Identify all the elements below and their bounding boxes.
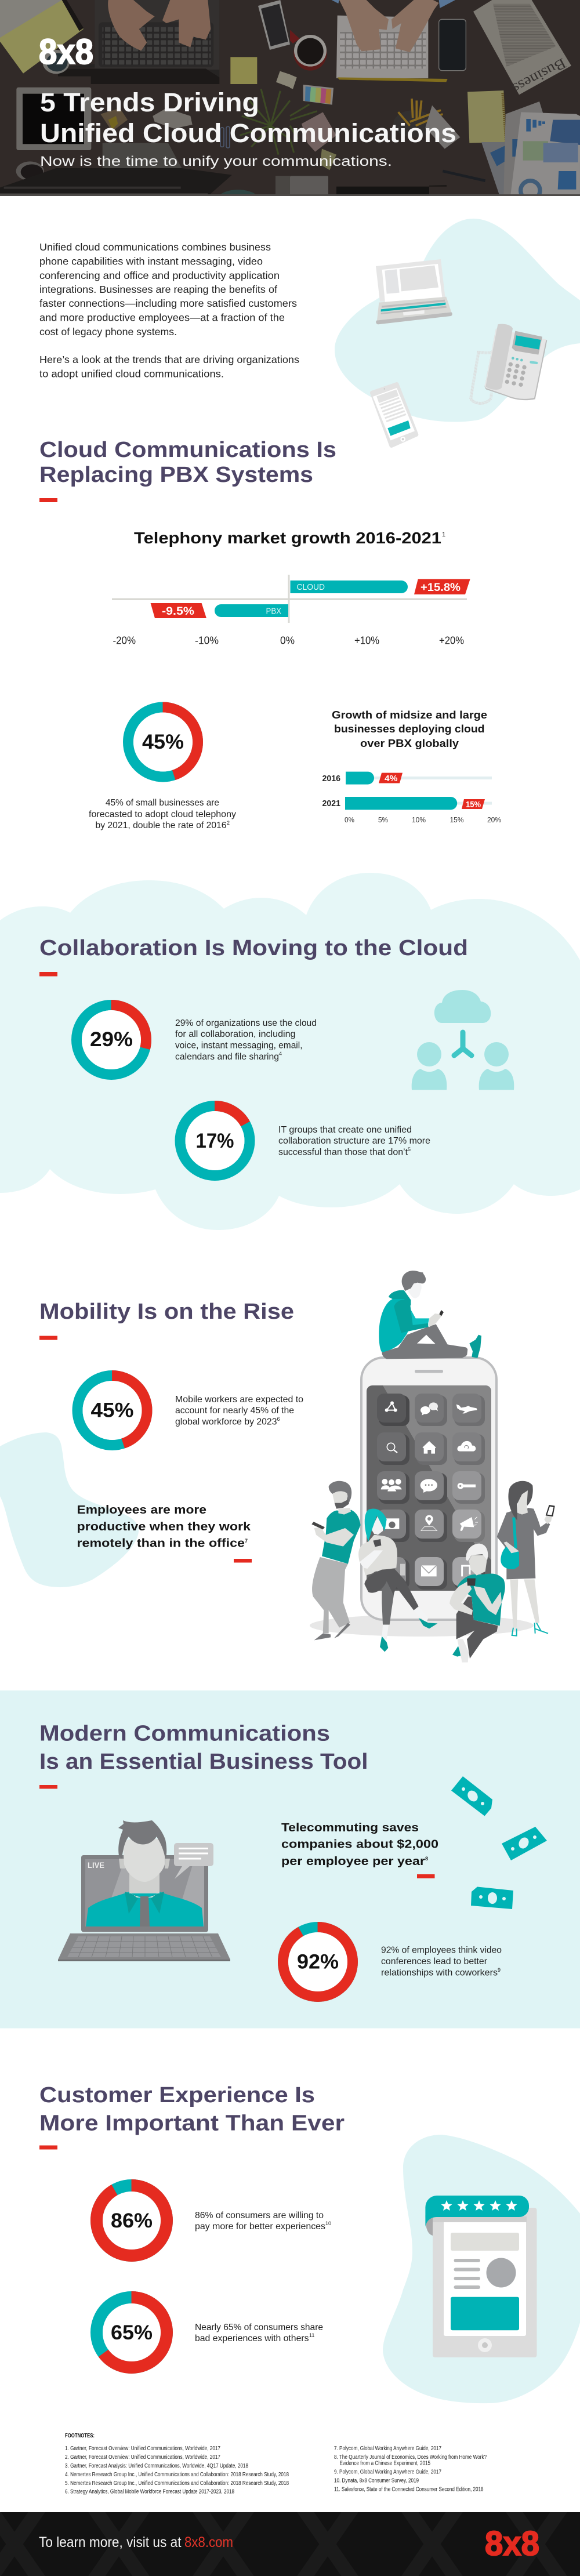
- donut: 45%: [78, 1376, 147, 1445]
- footnotes column 2: 9. Polycom, Global Working Anywhere Guide, 2017: [334, 2468, 441, 2475]
- bar: PBX: PBX: [266, 607, 281, 616]
- callout: telecommuting: [281, 1822, 438, 1868]
- text: mobile workers: [175, 1395, 303, 1427]
- icon: desk phone: [471, 324, 547, 403]
- tag: -9.5%: -9.5%: [162, 605, 194, 618]
- figure: seated man with phone: [449, 1544, 505, 1663]
- footnotes: [65, 2432, 487, 2495]
- intro text: [39, 241, 299, 379]
- hero subtitle: Now is the time to unify your communications.: [40, 154, 392, 169]
- caption: 45%: 45% of small businesses are: [106, 798, 219, 808]
- intro device icons: [372, 259, 547, 445]
- chart title: growth: businesses deploying cloud: [334, 723, 485, 735]
- text: 17%: 5: [408, 1146, 411, 1152]
- intro text: phone capabilities with instant messaging, video: [39, 255, 263, 267]
- figure: bearded man: [311, 1481, 361, 1640]
- intro text: Unified cloud communications combines business: [39, 241, 271, 253]
- section: Cloud Communications: [39, 438, 501, 830]
- axis labels: [345, 815, 501, 824]
- caption: 45%: by 2021, double the rate of 2016: [95, 821, 227, 830]
- text: 86%: 86% of consumers are willing to: [195, 2211, 324, 2221]
- chart title: 1: [442, 531, 445, 538]
- logo: 8x8 white: 8x8: [39, 32, 93, 71]
- donut: 17%: 17%: [196, 1130, 234, 1152]
- hero banner: [0, 0, 580, 200]
- footnotes column 2: Evidence from a Chinese Experiment, 2015: [340, 2460, 430, 2467]
- hero title: 5 Trends Driving: [40, 88, 259, 117]
- red accent: [39, 1785, 57, 1788]
- text: 65%: bad experiences with others: [195, 2334, 309, 2343]
- donut: 92%: [283, 1927, 353, 1997]
- text: 65%: [195, 2323, 323, 2343]
- footnotes column 1: 6. Strategy Analytics, Global Mobile Workforce Forecast Update 2017-2023, 2018: [65, 2488, 234, 2495]
- laptop keyboard: [58, 1933, 230, 1961]
- red accent: [39, 972, 57, 977]
- hero photo right half: Business: [510, 55, 568, 96]
- caption: 45%: forecasted to adopt cloud telephony: [89, 810, 236, 819]
- axis labels: -10%: [195, 634, 219, 646]
- intro text: and more productive employees—at a fraction of the: [39, 312, 285, 324]
- chart title: Telephony market growth 2016-2021: [134, 529, 441, 547]
- text: 29%: calendars and file sharing: [175, 1052, 279, 1062]
- bar: 2021: 2021: [322, 799, 340, 808]
- bar: 2016: 2016: [322, 774, 340, 783]
- text: 92%: 92% of employees think video: [381, 1945, 502, 1955]
- section: Modern Communications panel: [0, 1690, 580, 2029]
- figure: woman with teal hair: [358, 1508, 437, 1652]
- intro text: cost of legacy phone systems.: [39, 326, 177, 338]
- section: Customer Experience: [39, 2083, 580, 2403]
- donut: 86%: 86%: [111, 2209, 153, 2232]
- text: 29%: 29% of organizations use the cloud: [175, 1018, 317, 1028]
- icon: review tablet: [425, 2196, 537, 2357]
- blob background: [383, 2135, 580, 2403]
- text: mobile workers: account for nearly 45% of the: [175, 1406, 294, 1416]
- bar: PBX: [215, 604, 288, 617]
- text: 86%: [195, 2211, 331, 2232]
- intro text: to adopt unified cloud communications.: [39, 368, 224, 379]
- callout: telecommuting: companies about $2,000: [281, 1838, 438, 1851]
- chart title: growth: [332, 709, 487, 749]
- axis labels: 10%: [412, 815, 426, 824]
- stars: [441, 2200, 517, 2211]
- axis labels: [113, 634, 464, 646]
- axis labels: 5%: [378, 815, 388, 824]
- intro text: conferencing and office and productivity application: [39, 270, 280, 281]
- person: [86, 1820, 204, 1926]
- footnotes column 1: 5. Nemertes Research Group Inc., Unified Communications and Collaboration: 2018 Research Study, 2018: [65, 2480, 289, 2487]
- red accent: [39, 498, 57, 502]
- text: 92%: relationships with coworkers: [381, 1968, 498, 1978]
- section: Collaboration: [0, 873, 580, 1230]
- intro text: Here’s a look at the trends that are driving organizations: [39, 354, 299, 365]
- footnotes column 2: [334, 2445, 487, 2492]
- caption: 45%: [89, 798, 236, 830]
- text: 17%: collaboration structure are 17% more: [278, 1136, 430, 1146]
- callout: productive: remotely than in the office: [77, 1537, 245, 1550]
- heading: Customer Experience Is: [39, 2083, 315, 2107]
- axis labels: 0%: [345, 815, 354, 824]
- icon: cloud and people: [412, 990, 514, 1090]
- speech bubble: [174, 1843, 213, 1879]
- footnotes column 2: 7. Polycom, Global Working Anywhere Guide, 2017: [334, 2445, 441, 2452]
- callout: telecommuting: Telecommuting saves: [281, 1822, 419, 1834]
- laptop screen: [81, 1855, 208, 1932]
- chart title: growth: over PBX globally: [360, 738, 459, 749]
- text: 65%: Nearly 65% of consumers share: [195, 2323, 323, 2332]
- bar: 2016: 4%: [385, 774, 398, 783]
- heading: Mobility Is on the Rise: [39, 1300, 294, 1324]
- callout: productive: productive when they work: [77, 1521, 251, 1533]
- text: mobile workers: 6: [277, 1416, 280, 1422]
- heading: Is an Essential Business Tool: [39, 1750, 368, 1774]
- person left: [412, 1042, 447, 1090]
- text: 17%: successful than those that don’t: [278, 1147, 408, 1158]
- donut: 65%: [96, 2298, 167, 2367]
- text: mobile workers: global workforce by 2023: [175, 1417, 277, 1427]
- text: 29%: [175, 1018, 317, 1062]
- figure: woman with bag: [497, 1481, 555, 1636]
- text: 92%: [381, 1945, 502, 1978]
- figure: man sitting on phone: [379, 1271, 481, 1359]
- hero photo left half: [0, 0, 290, 196]
- donut: 29%: [77, 1005, 146, 1075]
- axis labels: +20%: [439, 634, 464, 646]
- donut: 45% small businesses: 45%: [142, 731, 184, 753]
- donut: 29%: 29%: [90, 1028, 133, 1051]
- axis labels: 15%: [450, 815, 464, 824]
- text: 65%: 11: [309, 2332, 314, 2338]
- diverging bar chart: [112, 575, 470, 646]
- illustration: video call on laptop: [58, 1820, 230, 1961]
- footnotes column 1: 3. Gartner, Forecast Analysis: Unified Communications, Worldwide, 4Q17 Update, 2018: [65, 2462, 248, 2469]
- bar: 2021: [322, 797, 492, 810]
- text: 29%: 4: [279, 1051, 282, 1057]
- illustration: people around a giant phone: [310, 1271, 555, 1663]
- text: mobile workers: Mobile workers are expected to: [175, 1395, 303, 1405]
- app glyphs row 3-5: [381, 1479, 478, 1576]
- icon: laptop: [376, 259, 452, 324]
- cloud background: [0, 873, 580, 1230]
- label: LIVE: LIVE: [88, 1860, 104, 1870]
- footnotes column 1: [65, 2445, 289, 2495]
- call to action: 8x8.com: [184, 2534, 233, 2550]
- tag: -9.5%: [151, 603, 206, 618]
- caption: 45%: 2: [227, 820, 230, 826]
- heading: Cloud Communications Is: [39, 438, 336, 462]
- red accent: [39, 2146, 57, 2149]
- app tiles: [377, 1394, 485, 1590]
- text: 29%: voice, instant messaging, email,: [175, 1040, 303, 1051]
- donut: 17%: [180, 1106, 249, 1175]
- axis labels: +10%: [354, 634, 379, 646]
- heading: [39, 2083, 345, 2135]
- heading: Replacing PBX Systems: [39, 463, 313, 487]
- intro text: integrations. Businesses are reaping the benefits of: [39, 284, 277, 295]
- text: 17%: IT groups that create one unified: [278, 1125, 412, 1135]
- icon: mobile phone: [372, 384, 416, 445]
- hero title: Unified Cloud Communications: [40, 118, 456, 148]
- text: 86%: 10: [325, 2221, 331, 2226]
- footnotes column 1: 2. Gartner, Forecast Overview: Unified Communications, Worldwide, 2017: [65, 2454, 220, 2461]
- bar: 2021: 15%: [466, 800, 481, 810]
- donut: 65%: 65%: [111, 2321, 153, 2344]
- chart title: growth: Growth of midsize and large: [332, 709, 487, 721]
- text: 29%: for all collaboration, including: [175, 1029, 296, 1039]
- axis labels: -20%: [113, 634, 136, 646]
- giant phone body: [361, 1358, 496, 1620]
- red accent: [39, 1336, 57, 1340]
- footer bar: [0, 2512, 580, 2576]
- callout: productive: [77, 1504, 251, 1550]
- bar: cloud: CLOUD: [297, 582, 325, 592]
- footnotes column 2: 11. Salesforce, State of the Connected Consumer Second Edition, 2018: [334, 2486, 484, 2492]
- axis labels: 20%: [487, 815, 501, 824]
- text: 17%: [278, 1125, 430, 1158]
- callout: productive: Employees are more: [77, 1504, 206, 1516]
- logo: 8x8 red: 8x8: [485, 2524, 539, 2563]
- footnotes heading: FOOTNOTES:: [65, 2432, 95, 2439]
- cloud: [434, 990, 491, 1023]
- red accent: [234, 1559, 252, 1562]
- footnotes column 1: 1. Gartner, Forecast Overview: Unified Communications, Worldwide, 2017: [65, 2445, 220, 2452]
- axis labels: 0%: [280, 634, 295, 646]
- tag: +15.8%: +15.8%: [420, 582, 461, 594]
- heading: [39, 438, 336, 487]
- heading: [39, 1721, 368, 1774]
- footnotes column 2: 10. Dynata, 8x8 Consumer Survey, 2019: [334, 2477, 419, 2484]
- intro text: faster connections—including more satisfied customers: [39, 297, 297, 309]
- heading: Modern Communications: [39, 1721, 330, 1746]
- connector: [454, 1032, 472, 1055]
- text: 86%: pay more for better experiences: [195, 2222, 325, 2232]
- bar: cloud: [290, 580, 408, 593]
- hero title: [40, 88, 456, 148]
- intro blob background: [335, 219, 580, 422]
- donut: 92%: 92%: [297, 1951, 339, 1973]
- donut: 45%: 45%: [90, 1399, 133, 1422]
- footnotes column 1: 4. Nemertes Research Group Inc., Unified Communications and Collaboration: 2018 Research Study, 2018: [65, 2471, 289, 2478]
- hero photo right half: [290, 0, 580, 200]
- app glyphs row 1-2: [385, 1401, 477, 1454]
- donut: 86%: [96, 2185, 167, 2256]
- callout: telecommuting: 8: [425, 1856, 428, 1862]
- footnotes column 2: 8. The Quarterly Journal of Economics, Does Working from Home Work?: [334, 2454, 487, 2461]
- callout: telecommuting: per employee per year: [281, 1855, 425, 1868]
- horizontal bar chart: [322, 772, 501, 824]
- donut: 45% small businesses: [128, 708, 198, 777]
- bar: 2016: [322, 772, 492, 785]
- tag: +15.8%: [414, 579, 470, 594]
- red accent: [417, 1874, 435, 1878]
- call to action: To learn more, visit us at: [39, 2534, 182, 2550]
- section: Mobility: [0, 1271, 555, 1663]
- text: 92%: 9: [498, 1967, 501, 1973]
- text: 92%: conferences lead to better: [381, 1957, 488, 1967]
- callout: productive: 7: [245, 1538, 248, 1544]
- blob background: [0, 1432, 139, 1587]
- person right: [479, 1042, 514, 1090]
- heading: More Important Than Ever: [39, 2111, 345, 2135]
- ground shadow: [310, 1614, 534, 1637]
- icon: money bills: [451, 1776, 547, 1909]
- heading: Collaboration Is Moving to the Cloud: [39, 936, 468, 960]
